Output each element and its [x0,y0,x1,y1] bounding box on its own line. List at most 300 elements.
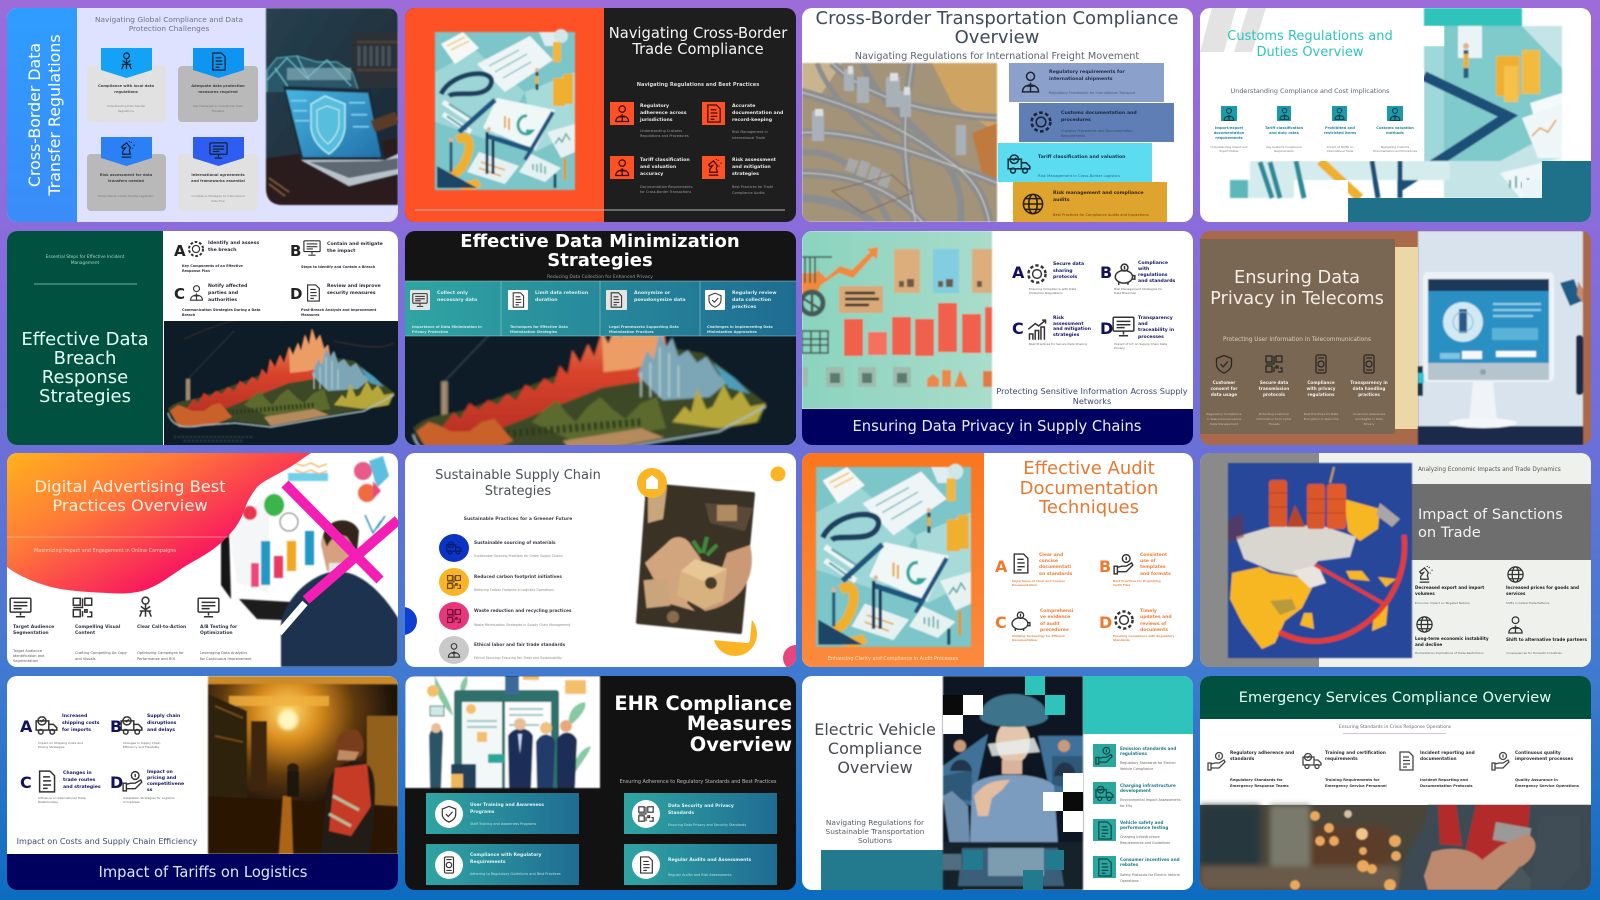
item: sourcing: Sustainable Sourcing Practices for Green Supply Chains [474,554,563,558]
item: transparency: practices [1358,392,1380,397]
item: tariff classification: and valuation [640,164,676,170]
item: accurate documentation [702,102,783,140]
image: team beside a compliance board [405,676,600,788]
gradient blob [7,453,311,594]
item C: Relationships [38,800,58,804]
item: regularly review: Regularly review [732,290,777,296]
item C: Documentation [1012,638,1037,642]
item: charging infrastructure [1093,782,1181,808]
subtitle [46,254,124,265]
card: user training: User Training and Awareness [470,802,544,808]
item D: Companies [123,800,140,804]
title: Compliance [828,739,922,758]
image: privacy dashboard on a monitor [1418,231,1583,445]
item: limit data retention [508,290,588,334]
item: training: Training and certification [1325,750,1386,756]
band title [7,854,398,890]
item C: trade routes [63,777,96,783]
item: vehicle safety: Charging Infrastructure [1120,835,1160,839]
panel: Impact of Tariffs on Logistics [7,676,398,890]
item: long-term instability [1415,617,1489,655]
title: Cross-Border Transportation Compliance [816,8,1178,29]
item: compliance: Compliance [1307,380,1335,385]
item: collect only necessary data: Importance of Data Minimization in [412,325,482,329]
panel: Ensuring Data Privacy in Supply Chains [801,231,1193,445]
item: waste: Waste reduction and recycling practices [474,608,572,614]
panel: Cross-Border Transportation Compliance Overview [797,8,1193,228]
item: alternative partners: Shift to alternative trade partners [1506,637,1587,642]
item: prohibited items [1324,106,1356,153]
item: incident reporting: Documentation Protocols [1420,784,1473,788]
card: risk assessment for data transfers: transfers needed [108,179,144,183]
panel: Effective Data Minimization Strategies [391,197,813,509]
item: customs valuation [1373,106,1418,153]
title: Trade Compliance [631,41,764,58]
item: import export documentation: documentation [1214,131,1245,135]
item: ethical labor: Ethical labor and fair trade standards [474,642,566,648]
item: transparency: and Rights in Data [1355,417,1383,421]
item C: C [995,613,1007,632]
item A [174,240,259,273]
item A: Increased [62,713,87,719]
item: consumer incentives [1093,856,1180,883]
item D: Impact of IoT on Supply Chain Data [1114,342,1167,346]
item C: Influence on International Trade [38,796,86,800]
item: carbon: Reduced carbon footprint initiatives [474,574,562,580]
item: target audience: Target Audience [12,649,43,653]
subtitle: Reducing Data Collection for Enhanced Privacy [547,274,653,280]
item: risk assessment: Compliance Audits [732,191,765,195]
card: compliance: Adhering to Regulatory Guidelines and Best Practices [470,872,561,876]
item B: B [290,242,301,260]
title [609,25,788,58]
item D: ss [147,788,153,793]
item: incident reporting: documentation [1420,756,1457,762]
image: isometric illustration with tiles [1230,8,1562,198]
item B [290,241,383,269]
item D: competitivene [147,781,184,787]
item C [995,608,1074,642]
card: audits: Regular Audits and Risk Assessments [668,873,732,877]
card: user training: Programs [470,809,495,815]
item A: on standards [1039,571,1073,577]
title: rotated: Transfer Regulations [45,34,64,197]
card: compliance with local data regulations: Regulations [118,109,134,113]
subtitle: Sustainable Practices for a Greener Future [464,516,572,522]
card: compliance with local data regulations: Understanding Data Transfer [107,104,146,108]
title [1418,506,1563,541]
card: tariff classification [998,143,1152,182]
item: anonymize: Anonymize or [634,290,671,296]
item C: Risk [1053,315,1065,321]
item: call to action: Performance and ROI [137,657,175,661]
item: customer consent [1207,356,1242,426]
item B [1100,260,1176,295]
item: A/B testing: Optimization [200,630,233,636]
item: transparency: Consumer Awareness [1353,412,1386,416]
item: customer consent: in Telecommunications [1207,417,1242,421]
item: continuous quality: Continuous quality [1515,750,1561,756]
subtitle: Navigating Regulations and Best Practices [637,82,759,88]
item: tariff classification: Tariff classification [1265,126,1303,130]
card: data security: Data Security and Privacy [668,803,734,809]
item B: Best Practices for Organizing [1113,579,1161,583]
item A: A [174,242,186,260]
item: tariff classification: Key Customs Compliance [1266,145,1302,149]
item: tariff classification [1265,106,1303,153]
item: customer consent: consent for [1211,386,1238,391]
title: Overview [690,733,792,756]
title band [1200,676,1591,719]
subtitle [96,16,242,32]
card: risk management: audits [1053,197,1070,203]
item B: Efficiency and Flexibility [123,745,160,749]
item D [290,283,381,317]
item: customs valuation: Navigating Customs [1381,145,1410,149]
item: long-term instability: and decline [1415,642,1442,647]
card: audits [624,844,777,885]
item A: the breach [208,247,237,253]
item: training: requirements [1325,756,1358,762]
title [21,329,149,407]
item: compelling visual: Content [75,630,96,636]
card: international agreements: Compliance Strategies for International [192,194,245,198]
title: Documentation [1020,478,1158,499]
item: A/B testing: Leveraging Data Analytics [200,651,247,655]
item C: Notify affected [208,283,247,289]
subtitle: Navigating Global Compliance and Data [95,15,243,24]
item: secure transmission: transmission [1259,386,1289,391]
item: accurate documentation: documentation and [732,110,783,116]
item: prohibited items: restricted items [1324,131,1356,135]
card: compliance: Compliance with Regulatory [470,852,542,858]
item: increased prices: Shifts in Global Trade Patterns [1506,601,1550,605]
card: adequate data protection measures: Transfers [211,109,225,113]
item: consumer incentives: Safety Protocols for Electric Vehicle [1120,873,1180,877]
item A: Importance of Clear and Concise [1012,579,1065,583]
item: decreased volumes: Economic Impact on Targeted Nations [1415,601,1470,605]
card: user training [426,793,579,834]
item B: B [1099,557,1111,576]
item: regulatory adherence: adherence across [640,110,687,116]
item B: Compliance [1138,260,1168,266]
card: customs documentation: Customs Procedures and Documentation [1061,129,1133,133]
subtitle: Protection Challenges [129,24,209,33]
item: customs valuation: Documentation and Procedures [1373,149,1418,153]
item: anonymize [606,290,686,334]
card: adequate data protection measures: Adequate data protection [191,84,245,88]
title: Overview [955,27,1039,48]
band title [802,409,1193,445]
item: waste: Waste Minimization Strategies in Supply Chain Management [474,623,571,627]
item B [110,713,180,749]
item D: D [1100,319,1113,338]
item D: Impact on [147,769,173,775]
item: target audience: Segmentation [13,630,49,636]
item D: Measures [301,313,319,317]
item: import export documentation [1211,106,1248,153]
item A: sharing [1053,268,1073,274]
title [460,231,740,271]
item B: Contain and mitigate [327,241,383,247]
item: regulatory adherence [1208,750,1294,788]
card: audits: Regular Audits and Assessments [668,857,752,863]
item: emission standards: Emission standards and [1120,746,1176,751]
title: Measures [687,712,792,735]
item: sourcing: Sustainable sourcing of materials [474,540,556,546]
subtitle: Navigating Regulations for [826,818,925,827]
card: data security [624,793,777,834]
item: regulatory adherence: Emergency Response Teams [1230,784,1289,788]
title [435,468,601,499]
item: import export documentation: Understanding Import and [1211,145,1248,149]
card: risk assessment for data transfers: Risk assessment for data [100,173,153,177]
title: Breach [54,348,116,369]
item A [1012,261,1084,295]
subtitle: Ensuring Standards in Crisis Response Operations [1339,724,1452,730]
item D: and [1138,321,1148,327]
item D [1099,608,1174,642]
card: tariff classification: Risk Management in Cross-Border Logistics [1038,173,1120,178]
item D: D [290,285,302,303]
item B: Consistent [1140,552,1168,558]
title: Effective Data Minimization [460,231,740,252]
item: import export documentation: Export Duties [1219,149,1239,153]
title: Strategies [547,250,653,271]
item: compelling visual [73,598,128,661]
item A: Identify and assess [208,240,259,246]
panel: Cross-Border Data Transfer Regulations [7,8,399,222]
item: decreased volumes [1415,566,1484,605]
item: risk assessment: strategies [732,171,759,177]
panel: Emergency Services Compliance Overview [1200,676,1591,891]
card: customs documentation: Customs documentation and [1061,110,1137,116]
item C: C [1012,319,1024,338]
item D: reviews of [1140,621,1166,627]
card: customs documentation [1019,103,1174,142]
item A: Documentation [1012,583,1037,587]
item A: Ensuring Compliance with Data [1029,287,1076,291]
item: carbon [439,568,562,596]
card: international agreements: International agreements [191,173,245,177]
item B: Data Breaches [1114,291,1136,295]
item: tariff classification: accuracy [640,171,663,177]
item A [995,552,1073,587]
item: tariff classification: Tariff classification [640,157,690,163]
item B: B [1100,263,1112,282]
item: customer consent: Customer [1213,380,1236,385]
item B: Changes in Supply Chain [123,741,161,745]
title [34,477,226,515]
subtitle: Management [71,260,99,266]
item: regularly review [705,290,777,334]
item: secure transmission: Threats [1267,422,1280,426]
band title: Ensuring Data Privacy in Supply Chains [853,418,1141,435]
item B: regulations [1138,272,1168,278]
item: tariff classification: and duty rates [1269,131,1299,135]
title: Effective Data [21,329,149,350]
item D: Privacy [1114,346,1125,350]
title: rotated [25,34,64,197]
item: secure transmission: Secure data [1260,380,1288,385]
item D: processes [1138,334,1164,340]
item: continuous quality: improvement processes [1515,756,1573,762]
item: training [1303,750,1387,788]
item C: Changes in [63,770,92,776]
card: compliance with local data regulations: regulations [114,90,139,94]
item: tariff classification: for Cross-Border Transactions [640,190,692,194]
item: compliance: regulations [1308,392,1335,397]
item C: of audit [1040,621,1061,627]
title: Response [42,367,128,388]
item C: C [174,285,185,303]
item: secure transmission: Protecting Customer [1259,412,1290,416]
item A: protocols [1053,274,1078,280]
item: tariff classification: Requirements [1274,149,1294,153]
item: target audience: Segmentation [13,659,38,663]
item: consumer incentives: Consumer incentives and [1120,857,1180,862]
item D: Ensuring Compliance with Regulatory [1113,634,1174,638]
subtitle: Maximizing Impact and Engagement in Online Campaigns [34,548,176,554]
item B: Audit Files [1113,583,1131,587]
item: limit data retention: Minimization Strategies [510,330,557,334]
card: regulatory requirements: Regulatory Framework for International Transport [1049,91,1136,95]
title: rotated: Cross-Border Data [25,43,44,187]
item: emission standards [1093,744,1176,771]
item: prohibited items: International Trade [1327,149,1353,153]
item: emission standards: Regulatory Standards for Electric [1120,761,1176,765]
card: compliance with local data regulations [87,48,166,122]
item: increased prices [1506,567,1579,605]
item: call to action [137,597,186,661]
item: regulatory adherence: Regulatory [640,103,669,109]
item: anonymize: Legal Frameworks Supporting Data [609,325,679,329]
title [1020,458,1158,518]
item: customer consent: Data Management [1210,422,1239,426]
item: long-term instability: Long-term economic instability [1415,636,1489,641]
subtitle: Essential Steps for Effective Incident [46,254,125,260]
subtitle: Networks [1073,396,1111,406]
item: regularly review: practices [732,304,756,310]
item: transparency [1350,355,1388,426]
item: sourcing [439,534,563,562]
item: call to action: Optimizing Campaigns for [137,651,184,655]
title [1228,30,1392,56]
item C: assessment [1053,321,1084,327]
item: ethical labor [439,636,566,664]
pink cross [285,484,398,600]
item: regularly review: data collection [732,297,771,303]
subtitle: Navigating Regulations for International Freight Movement [855,51,1139,62]
item: continuous quality: Quality Assurance in [1515,778,1558,782]
item: incident reporting: Incident Reporting and [1420,778,1468,782]
title: on Trade [1418,524,1481,541]
item: incident reporting: Incident reporting and [1420,750,1475,756]
item: A/B testing [198,598,252,661]
card: customs documentation: Requirements [1061,134,1086,138]
title: Impact of Sanctions [1418,506,1563,523]
item: prohibited items: Prohibited and [1325,126,1355,130]
band title: Impact of Tariffs on Logistics [99,864,307,881]
subtitle: Analyzing Economic Impacts and Trade Dynamics [1418,467,1561,473]
item B: B [110,717,122,736]
subtitle: Protecting Sensitive Information Across Supply [996,386,1188,396]
card: adequate data protection measures: measures required [198,90,238,94]
panel: Digital Advertising Best Practices Overview [7,453,398,667]
subtitle [996,386,1188,406]
item A: A [995,557,1008,576]
item B: templates [1140,564,1166,570]
item: regulatory adherence: standards [1230,756,1255,762]
item: increased prices: Increased prices for goods and [1506,585,1579,590]
image: 3D data landscape, enlarged [405,336,796,445]
title: Duties Overview [1256,45,1364,60]
panel: Customs Regulations and Duties Overview [1200,8,1591,222]
item D: D [1099,613,1112,632]
item: consumer incentives: rebates [1120,862,1139,867]
image: highway interchange [797,63,997,228]
item B: disruptions [147,720,177,726]
item C: Breach [182,313,196,317]
item: tariff classification: Documentation Requirements [640,185,693,189]
item C: and strategies [63,784,101,790]
band: four strategies [405,281,796,336]
item B [1099,552,1171,587]
title: Strategies [39,386,131,407]
item: vehicle safety [1093,819,1170,845]
item: vehicle safety: Vehicle safety and [1120,820,1163,825]
card: adequate data protection measures [178,48,258,122]
item: secure transmission [1256,356,1292,426]
item: increased prices: services [1506,591,1526,596]
item C: Communication Strategies During a Data [182,308,261,312]
item: risk assessment [702,156,777,195]
item B: Risk Management Strategies for [1114,287,1163,291]
card: data security: Standards [668,810,694,816]
item: target audience: Target Audience [13,624,54,630]
panel: Sustainable Supply Chain Strategies [389,453,809,671]
item: secure transmission: protocols [1263,392,1286,397]
item: compelling visual: Crafting Compelling Ad Copy [75,651,128,655]
image: world map with barrels [1228,463,1412,658]
item: compliance: with privacy [1306,386,1336,391]
item C: parties and [208,290,238,296]
item: alternative partners [1506,617,1587,655]
card: risk management: Best Practices for Compliance Audits and Inspections [1053,213,1149,217]
image: isometric documents illustration [816,464,971,647]
item A: Impact on Shipping Costs and [38,741,83,745]
image: responder with crossed arms and bokeh lights [1200,805,1591,891]
item: collect only necessary data [410,290,482,334]
item: regulatory adherence: Regulatory adherence and [1230,750,1294,756]
teal header block [1083,676,1193,734]
item: consumer incentives: Operations [1120,879,1139,883]
item: risk assessment: Risk assessment [732,157,777,163]
item D: traceability in [1138,327,1174,333]
panel: Impact of Sanctions on Trade [1200,453,1591,667]
item: collect only necessary data: Collect only [437,290,468,296]
item C: procedures [1040,627,1069,633]
item A: Pricing Strategies [38,745,65,749]
item: regulatory adherence: jurisdictions [639,117,673,123]
subtitle: Ensuring Adherence to Regulatory Standards and Best Practices [620,779,777,785]
item B: and standards [1138,278,1176,284]
decorative quote marks [1200,8,1266,52]
title: Strategies [485,484,551,499]
item D: Post-Breach Analysis and Improvement [301,308,377,312]
title: Techniques [1038,497,1139,518]
card: risk assessment for data transfers: Future Trends in Data Transfer Legislation [98,194,154,198]
